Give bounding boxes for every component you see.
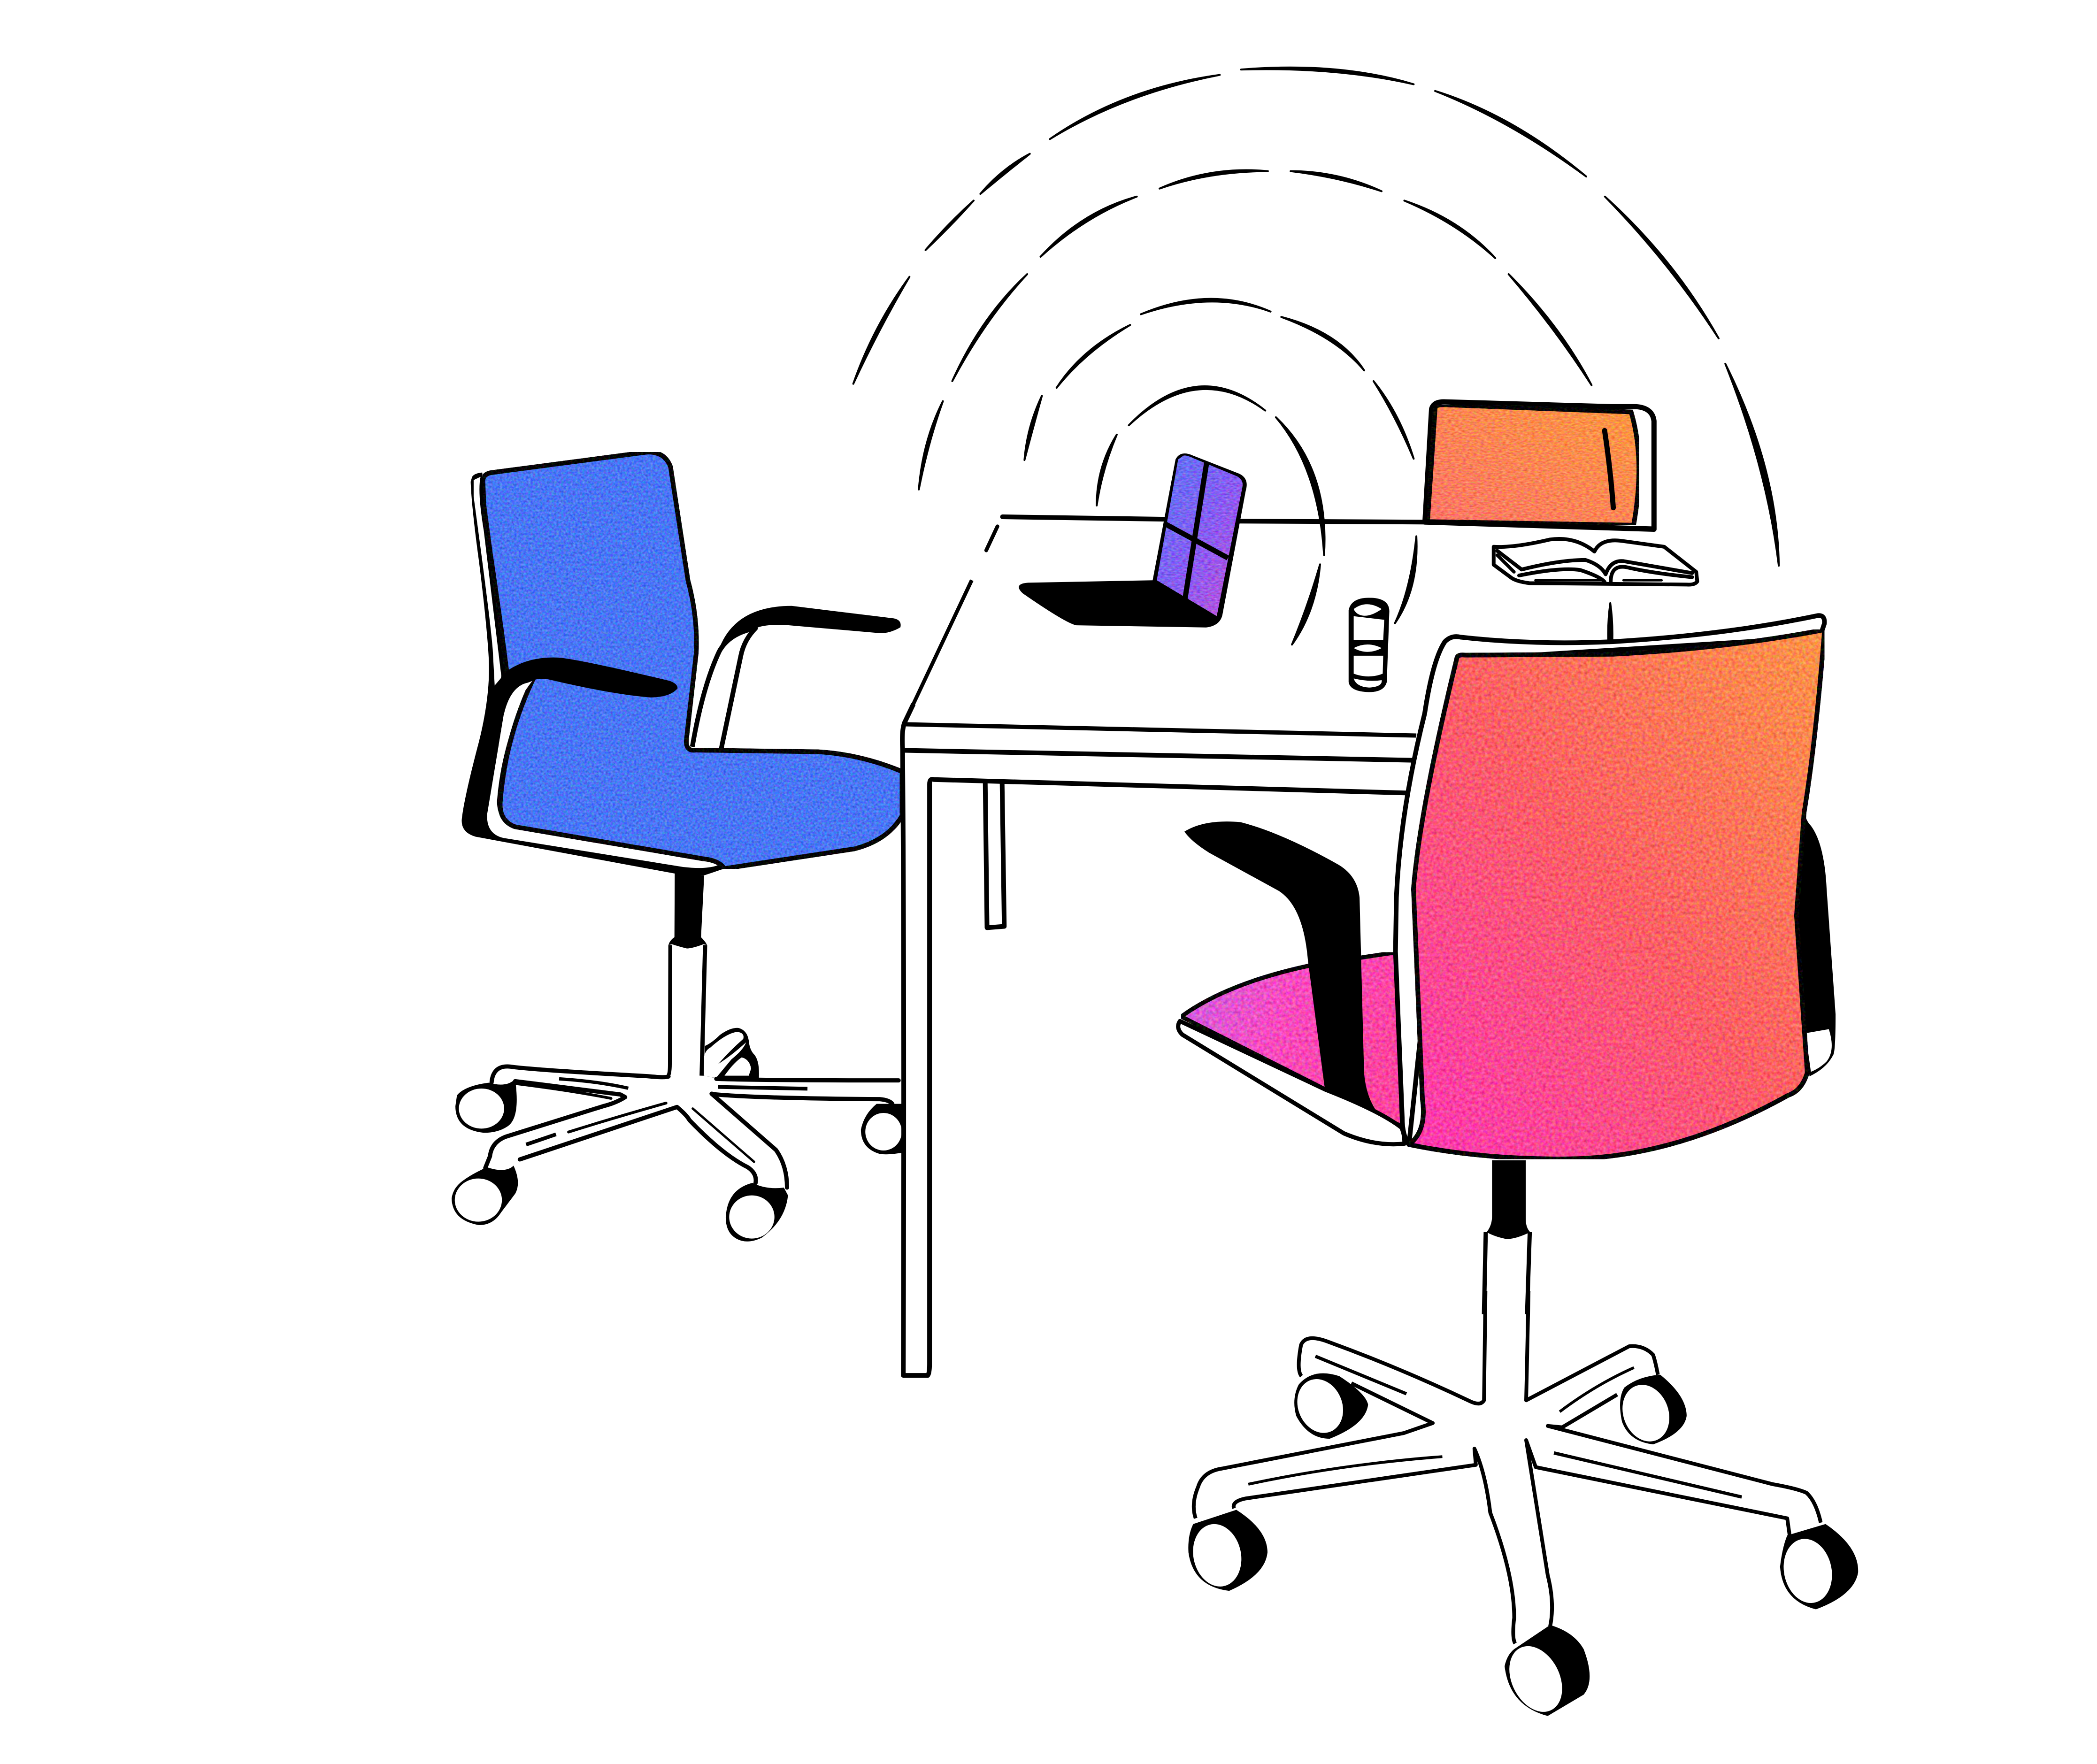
laptop: [1019, 453, 1247, 628]
pink chair base: [1188, 1291, 1858, 1716]
blue chair: [462, 452, 902, 875]
blue chair far arm: [692, 628, 755, 750]
orange chair back: [1428, 405, 1639, 525]
pink chair armrest: [1184, 821, 1380, 1115]
caster: [861, 1104, 908, 1154]
caster: [1618, 1375, 1687, 1444]
blue chair near armrest: [489, 658, 677, 714]
caster: [1501, 1625, 1590, 1716]
glass of water: [1349, 598, 1390, 692]
blue chair far armrest: [718, 606, 901, 653]
pink chair column: [1487, 1160, 1530, 1239]
caster: [726, 1183, 788, 1242]
caster: [1780, 1524, 1858, 1609]
caster: [452, 1166, 518, 1225]
pink chair: [1178, 615, 1836, 1314]
blue chair rear caster: [704, 1028, 759, 1078]
pink chair seat: [1181, 952, 1402, 1127]
table top back edges: [986, 517, 1654, 550]
open book: [1494, 539, 1697, 585]
pink chair rear shadow: [1795, 812, 1836, 1076]
back leg: [985, 782, 1004, 928]
signal arcs: [853, 68, 1779, 644]
blue chair base: [452, 1066, 908, 1242]
table left edge: [906, 580, 972, 721]
caster: [1293, 1373, 1368, 1439]
blue chair frame: [462, 473, 724, 875]
table legs and apron: [902, 704, 1416, 1375]
blue chair back and seat: [483, 452, 902, 869]
caster: [1188, 1510, 1267, 1591]
blue chair column: [668, 872, 759, 1078]
pink chair back: [1409, 629, 1824, 1159]
laptop screen: [1157, 455, 1243, 616]
pink chair back frame: [1396, 615, 1824, 1144]
pink chair seat front: [1178, 1021, 1405, 1144]
orange chair behind table: [1425, 402, 1654, 529]
caster: [455, 1081, 517, 1133]
